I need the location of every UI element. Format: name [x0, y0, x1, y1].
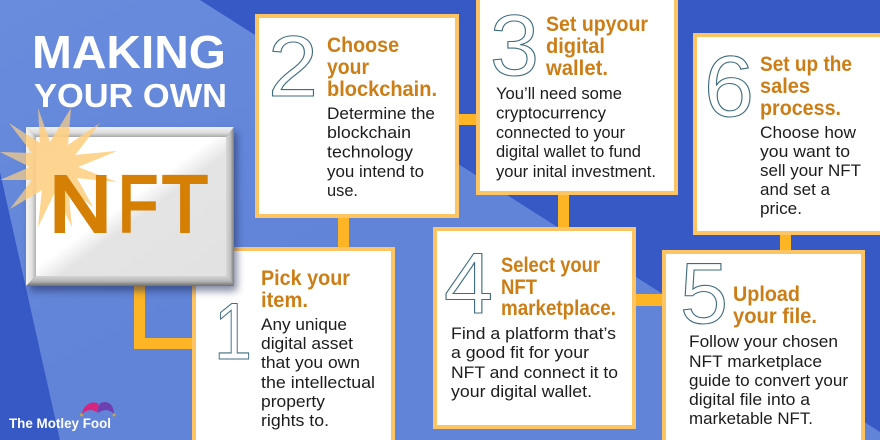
heading: Select your — [501, 254, 600, 277]
card frame — [194, 249, 393, 440]
body text: You’ll need some — [496, 84, 622, 103]
heading: Set up the — [760, 53, 852, 76]
body text: technology — [327, 142, 414, 162]
body text: blockchain — [327, 123, 411, 142]
body text: digital file into a — [689, 390, 811, 409]
card frame — [478, 0, 676, 193]
body text: your inital investment. — [496, 162, 656, 181]
heading: NFT — [501, 276, 537, 299]
body text: a good fit for your — [451, 343, 589, 362]
panel: step 1 — [194, 249, 393, 440]
panel: step 5 — [664, 246, 863, 440]
body text: cryptocurrency — [496, 104, 606, 122]
body text: Determine the — [327, 104, 435, 123]
heading: process. — [760, 97, 841, 120]
body text: that you own — [261, 353, 360, 372]
plaque shadow — [30, 132, 237, 291]
heading — [327, 34, 437, 101]
body text: digital asset — [261, 334, 353, 353]
heading: Choose — [327, 34, 399, 57]
body text: use. — [327, 181, 358, 200]
card frame — [257, 16, 457, 216]
plaque face — [36, 137, 226, 276]
body text: guide to convert your — [689, 371, 848, 390]
wordmark: The Motley Fool — [9, 415, 111, 431]
title line: making: MAKING — [32, 26, 226, 78]
body text: Any unique — [261, 315, 347, 334]
heading: item. — [261, 289, 308, 312]
starburst — [0, 108, 117, 227]
heading: sales — [760, 75, 810, 98]
heading: digital — [546, 35, 605, 58]
body text: marketable NFT. — [689, 409, 813, 428]
NFT word: F — [118, 160, 158, 248]
body text: the intellectual — [261, 373, 375, 392]
heading: Pick your — [261, 267, 350, 290]
body text: Find a platform that’s — [451, 324, 616, 343]
heading — [501, 254, 616, 320]
NFT word — [49, 160, 208, 248]
panel: step 4 — [435, 229, 634, 427]
body text: connected to your — [496, 123, 625, 142]
numeral 2: 2 — [268, 19, 318, 115]
heading: Set upyour — [546, 13, 648, 36]
body text: digital wallet to fund — [496, 142, 641, 161]
card frame — [695, 35, 880, 233]
heading: marketplace. — [501, 297, 616, 320]
body text: and set a — [760, 180, 831, 199]
heading — [545, 13, 648, 80]
body text: NFT and connect it to — [451, 363, 618, 382]
body text: price. — [760, 199, 802, 218]
body text: property — [261, 392, 326, 411]
title — [32, 26, 227, 115]
body text: Choose how — [760, 123, 857, 142]
connectors — [134, 114, 791, 349]
body text: Follow your chosen — [689, 332, 838, 351]
numeral 4: 4 — [444, 236, 493, 332]
heading: Upload — [733, 283, 800, 306]
body text: you want to — [760, 142, 850, 161]
heading: your file. — [733, 305, 817, 328]
heading — [261, 267, 350, 312]
logo: The Motley Fool — [9, 402, 116, 431]
NFT plaque — [0, 108, 237, 291]
heading — [760, 53, 852, 120]
body text — [760, 123, 861, 218]
body text — [496, 84, 656, 181]
numeral 3: 3 — [490, 0, 539, 94]
heading: wallet. — [545, 57, 608, 80]
body text — [327, 104, 435, 200]
body text: your digital wallet. — [451, 382, 592, 401]
heading: your — [327, 56, 369, 79]
body text — [261, 315, 375, 430]
panel: step 2 — [257, 16, 457, 216]
plaque frame — [26, 127, 234, 286]
body text: NFT marketplace — [689, 352, 822, 371]
numeral 5: 5 — [680, 246, 728, 342]
body text — [689, 332, 848, 428]
card frame — [435, 229, 634, 427]
NFT word: T — [162, 160, 208, 248]
body text — [451, 324, 618, 401]
title line: your own: YOUR OWN — [34, 78, 227, 115]
panel: step 3 — [478, 0, 676, 193]
numeral 6: 6 — [704, 39, 754, 135]
heading — [733, 283, 817, 328]
body text: you intend to — [327, 162, 424, 181]
numeral 1: 1 — [214, 287, 252, 377]
panel: step 6 — [695, 35, 880, 233]
NFT word: N — [49, 160, 112, 248]
card frame — [664, 252, 863, 440]
icon: jester hat — [80, 402, 116, 416]
heading: blockchain. — [327, 78, 437, 101]
body text: rights to. — [261, 411, 329, 430]
body text: sell your NFT — [760, 161, 861, 180]
